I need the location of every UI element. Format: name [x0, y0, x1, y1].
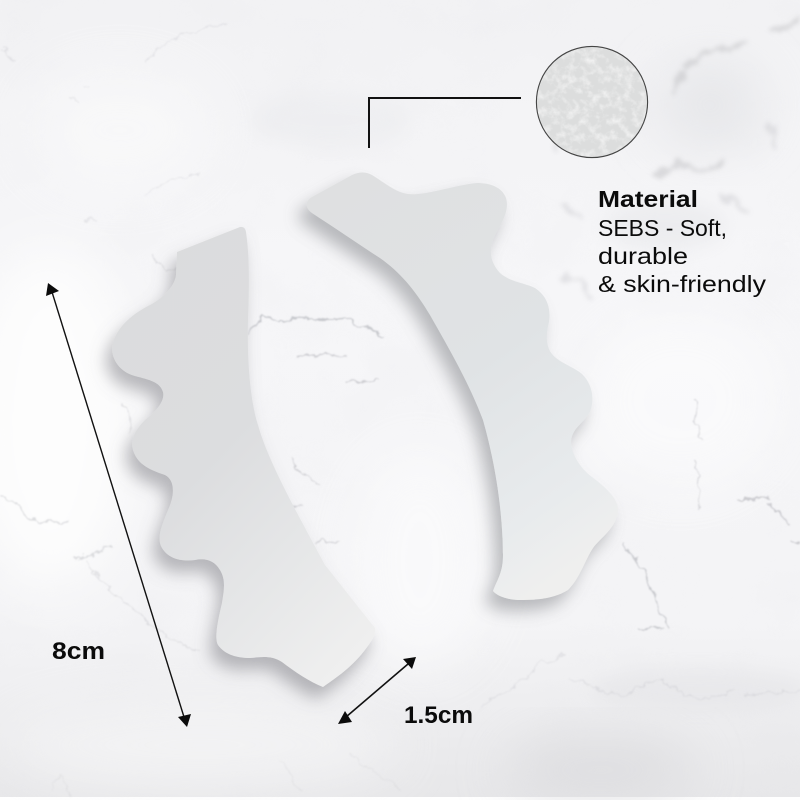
silicone piece: left: [112, 227, 375, 687]
material text block: [598, 186, 767, 297]
length arrow: 8cm: [46, 283, 191, 727]
material swatch circle: [536, 46, 648, 158]
material text block: & skin-friendly: [598, 271, 767, 297]
silicone piece: right: [307, 172, 618, 600]
material text block: Material: [598, 186, 698, 212]
callout leader line: [369, 98, 521, 148]
width arrow: 1.5cm: [338, 657, 416, 724]
material text block: SEBS - Soft,: [598, 215, 727, 241]
width label: 1.5cm: [404, 702, 473, 729]
marble blotches: [555, 20, 800, 295]
length label: 8cm: [52, 638, 105, 665]
material text block: durable: [598, 243, 688, 269]
